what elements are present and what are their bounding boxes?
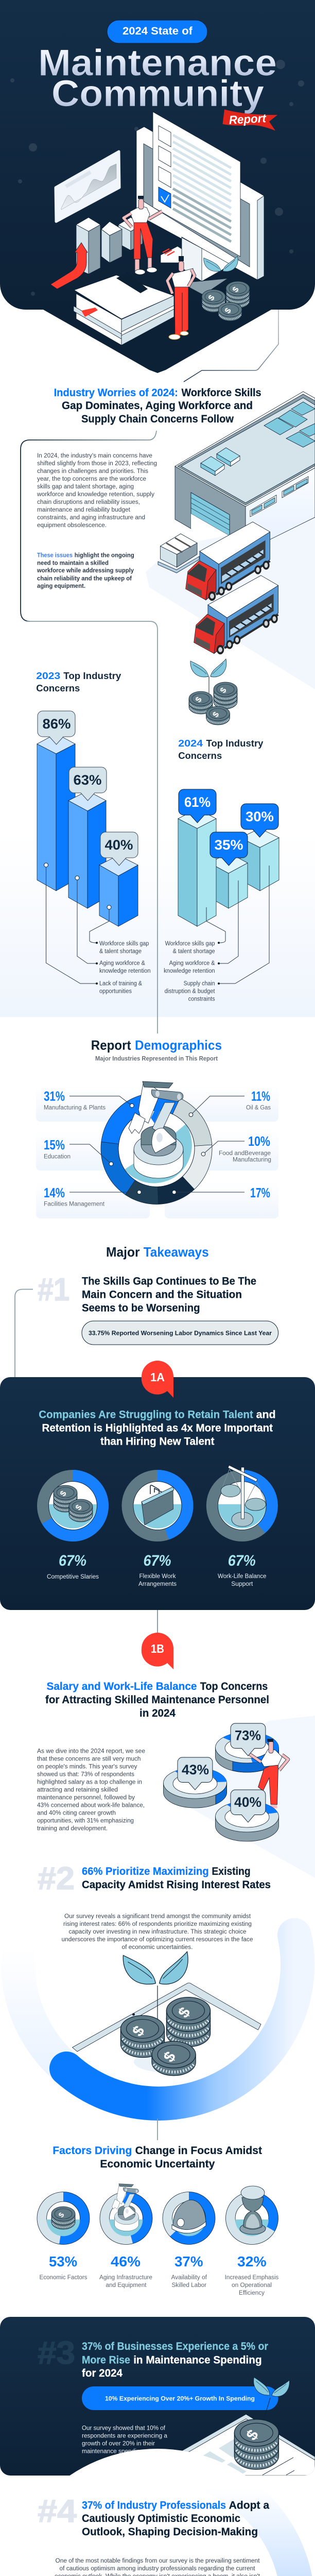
donut: skilled labor — [163, 2192, 215, 2289]
donut: flexible work: Flexible Work — [139, 1573, 176, 1580]
illustration: swoosh with laptop, plant and coins — [18, 1935, 297, 2104]
text block: takeaway 4: One of the most notable findings from our survey is the prevailing sentiment — [56, 2558, 260, 2564]
labels: Aging workforce & — [169, 960, 215, 967]
text block: 1B paragraph: training and development. — [37, 1826, 108, 1832]
text block: concerns intro: chain disruptions and reliability issues, — [37, 499, 140, 505]
stat: 14%: Facilities Management — [44, 1201, 105, 1208]
heading: takeaway 3: More Rise — [82, 2354, 130, 2366]
callout pill: 33.75% — [82, 1321, 278, 1345]
pie: 40%: 40% — [234, 1794, 261, 1810]
text block: 1B paragraph: on people's minds. This year's survey — [37, 1764, 137, 1770]
title: Maintenance — [38, 42, 277, 83]
heading: takeaway 1: Seems to be Worsening — [82, 1302, 200, 1314]
laptop with coins and plant — [182, 2377, 315, 2476]
callout pill: 33.75%: 33.75% Reported Worsening Labor Dynamics Since Last Year — [89, 1330, 272, 1336]
heading: Industry Worries: Workforce Skills — [181, 387, 261, 399]
stat panels — [36, 1086, 278, 1218]
stat: 11%: Oil & Gas — [246, 1105, 271, 1111]
text block: 1B paragraph: and 40% citing career growth — [37, 1810, 116, 1817]
text block: concerns intro: maintenance and reliability budget — [37, 507, 131, 513]
swoosh faint tail — [18, 1947, 66, 2069]
heading: 2024: 2024 — [178, 738, 203, 749]
text block: these issues: chain reliability and the upkeep of — [37, 575, 132, 582]
light background band — [0, 517, 315, 1017]
heading: 2024 — [178, 738, 264, 761]
labels: knowledge retention — [99, 968, 150, 974]
icon: coins — [202, 281, 250, 321]
icon: coins: $ — [223, 307, 233, 315]
chart: 2023 top industry concerns — [36, 670, 150, 994]
person — [249, 1739, 288, 1808]
donut: competitive salaries: Competitive Slaries — [47, 1574, 99, 1580]
heading: Report Demographics: Report — [91, 1038, 131, 1053]
heading: 1B — [45, 1681, 269, 1719]
heading: 1A: Companies Are Struggling to Retain Talent — [39, 1409, 253, 1421]
text block: these issues: need to maintain a skilled — [37, 560, 109, 566]
heading: factors driving: Change in Focus Amidst — [135, 2145, 262, 2157]
bubble: 73%: 73% — [235, 1728, 261, 1743]
donut: work-life balance — [212, 1465, 272, 1587]
truck rear — [186, 522, 270, 601]
text block: 1B paragraph: showed us that: 73% of respondents — [37, 1771, 134, 1777]
labels: Lack of training & — [99, 981, 142, 987]
leader lines — [44, 863, 111, 985]
donut: competitive salaries: $ — [74, 1503, 84, 1512]
text block: concerns intro: changes in challenges and priorities. This — [37, 468, 148, 474]
donut: economic factors: Economic Factors — [39, 2275, 87, 2281]
text block: takeaway 4 — [55, 2558, 260, 2576]
donut: flexible work — [128, 1476, 187, 1587]
bar: 86% — [37, 711, 75, 891]
connector line: hero to worries — [184, 310, 278, 382]
heading: Industry Worries — [54, 387, 261, 425]
stat: 11% — [246, 1088, 271, 1111]
panel: 1A retention — [0, 1361, 315, 1610]
bubble: 35%: 35% — [214, 837, 243, 853]
text block: 1B paragraph: that these concerns are still very much — [37, 1756, 141, 1762]
labels — [99, 941, 150, 994]
heading: Industry Worries: Supply Chain Concerns Follow — [81, 413, 234, 425]
heading: takeaway 2: 66% Prioritize Maximizing — [82, 1866, 209, 1877]
text block: 1B paragraph: 43% concerned about work-life balance, — [37, 1802, 145, 1808]
text block: concerns intro: skills gap and talent shortage, aging — [37, 484, 134, 490]
heading: factors driving: Factors Driving — [52, 2145, 132, 2157]
bar: 61% — [178, 789, 216, 926]
donut: competitive salaries — [43, 1476, 103, 1580]
donut: operational efficiency: on Operational — [232, 2282, 272, 2289]
badge: 1B — [142, 1633, 173, 1669]
bar columns — [76, 217, 143, 274]
text block: takeaway 2: Our survey reveals a significant trend amongst the community amidst — [64, 1913, 251, 1920]
text block: takeaway 3: maintenance spending — [82, 2448, 143, 2454]
heading: takeaway 3: 37% of Businesses Experience a 5% or — [82, 2341, 268, 2352]
donut: skilled labor: Availability of — [171, 2275, 207, 2281]
icon: plant and coins: $ — [194, 696, 204, 704]
labels: Aging workforce & — [99, 960, 145, 967]
heading: 2023: Concerns — [36, 683, 80, 693]
stat: 14% — [44, 1185, 105, 1208]
text block: takeaway 3: Our survey showed that 10% of — [82, 2425, 166, 2431]
text block: concerns intro: shifted slightly from those in 2023, reflecting — [37, 461, 157, 467]
bar: 63%: 63% — [73, 772, 102, 788]
chart: demographics donut — [36, 1081, 278, 1218]
heading: takeaway 1 — [82, 1276, 256, 1314]
stat: 15% — [44, 1137, 71, 1160]
text block: 1B paragraph: highlighted salary as a top challenge in — [37, 1780, 142, 1786]
heading: takeaway 1: The Skills Gap Continues to Be The — [82, 1276, 256, 1287]
donut: competitive salaries: 67% — [59, 1552, 86, 1569]
icon: coins: $ — [231, 285, 241, 294]
heading: takeaway 3 — [82, 2341, 268, 2379]
plant — [123, 1952, 188, 2022]
heading: takeaway 4 — [82, 2500, 269, 2538]
text block: these issues: highlight the ongoing — [75, 552, 134, 558]
donut: work-life balance: 67% — [228, 1552, 256, 1569]
donut: operational efficiency: 32% — [237, 2253, 267, 2269]
pill: 2024 State of: 2024 State of — [122, 25, 193, 37]
donut: skilled labor: 37% — [174, 2253, 203, 2269]
laptop outline — [72, 1983, 261, 2052]
ribbon: Report: Report — [229, 111, 267, 127]
text block: takeaway 4: of cautious optimism among industry professionals regarding the current — [60, 2566, 255, 2572]
heading: 2024: Top Industry — [206, 738, 264, 749]
labels: & talent shortage — [99, 948, 142, 955]
badge: 1B: 1B — [151, 1642, 164, 1655]
heading: 2023: Top Industry — [63, 670, 121, 681]
light diagonal background — [170, 1716, 315, 1878]
donut ring — [90, 1082, 223, 1215]
donut: aging infrastructure: and Equipment — [106, 2282, 147, 2289]
pill: 2024 State of — [107, 20, 207, 43]
heading: takeaway 1: Main Concern and the Situation — [82, 1289, 242, 1301]
bar: 63% — [68, 767, 107, 908]
donut: aging infrastructure — [99, 2184, 152, 2289]
heading: Major Takeaways: Major — [106, 1244, 140, 1260]
donut: operational efficiency — [225, 2186, 279, 2296]
pie: 43% — [157, 1757, 233, 1808]
labels: knowledge retention — [164, 968, 215, 974]
text block: 1B paragraph: attracting and retaining skilled — [37, 1787, 118, 1793]
bar: 30% — [240, 804, 279, 891]
callout pill: 10% — [82, 2386, 278, 2410]
panel: takeaway 3 — [0, 2317, 315, 2481]
stat: 10%: Manufacturing — [233, 1157, 271, 1163]
heading: takeaway 4: Adopt a — [229, 2500, 269, 2512]
title — [38, 42, 277, 114]
text block: takeaway 3 — [82, 2425, 168, 2454]
text block: these issues: workforce while addressing supply — [37, 568, 134, 574]
text block: takeaway 3: respondents are experiencing a — [82, 2433, 168, 2439]
ribbon: Report — [222, 109, 277, 131]
person standing — [124, 196, 162, 275]
coins: $ — [129, 2023, 148, 2040]
heading: Report Demographics — [91, 1038, 222, 1053]
icon: plant and coins: $ — [219, 686, 229, 695]
donut: skilled labor: Skilled Labor — [172, 2282, 206, 2289]
stat: 31% — [44, 1088, 106, 1111]
donut: operational efficiency: Increased Emphasis — [225, 2275, 279, 2281]
bar: 61%: 61% — [184, 794, 211, 810]
text block: concerns intro: In 2024, the industry's main concerns have — [37, 453, 152, 459]
stat: 10% — [219, 1133, 271, 1163]
donut: economic factors — [37, 2192, 90, 2281]
text block: 1B paragraph: As we dive into the 2024 report, we see — [37, 1749, 145, 1755]
monitor — [136, 127, 264, 280]
stat: 15%: 15% — [44, 1137, 65, 1153]
leader lines — [69, 1096, 244, 1194]
stat: 31%: Manufacturing & Plants — [44, 1105, 106, 1111]
boxes on pallet — [158, 534, 199, 573]
heading: 1B: Top Concerns — [200, 1681, 268, 1692]
icon: plant and coins — [189, 659, 237, 725]
connector: swoosh to factors — [157, 2119, 158, 2140]
illustration: warehouse and trucks — [158, 392, 315, 725]
takeaway number 1: #1 — [38, 1272, 69, 1308]
text block: concerns intro: equipment obsolescence. — [37, 522, 107, 529]
heading: factors driving — [52, 2145, 262, 2170]
heading: 1A: than Hiring New Talent — [100, 1436, 214, 1448]
labels: Workforce skills gap — [99, 941, 149, 947]
bar: 40% — [99, 832, 138, 926]
text block: 1B paragraph: opportunities, with 31% emphasizing — [37, 1818, 134, 1824]
stat: 15%: Education — [44, 1154, 71, 1160]
document checklist — [153, 112, 240, 257]
illustration: isometric pies and person — [157, 1723, 288, 1841]
donut: work-life balance: Support — [231, 1581, 253, 1587]
text block: 1B paragraph — [37, 1749, 145, 1832]
heading: 1A — [39, 1409, 276, 1448]
icon: plant and coins: $ — [211, 710, 221, 719]
heading: Industry Worries: Gap Dominates, Aging Workforce and — [62, 400, 253, 412]
text block: takeaway 2: rising interest rates: 66% of respondents prioritize maximizing existing — [63, 1921, 252, 1927]
bubble: 35% — [210, 832, 248, 866]
stat: 31%: 31% — [44, 1088, 65, 1104]
text block: these issues: These issues — [37, 552, 73, 558]
icon: robot arm — [129, 1081, 183, 1178]
heading: 2023 — [36, 670, 121, 693]
donut: operational efficiency: Efficiency — [239, 2290, 265, 2296]
bar: 86%: 86% — [42, 716, 71, 732]
heading: 1B: in 2024 — [139, 1707, 176, 1719]
text block: takeaway 2: capacity over investing in new infrastructure. This strategic choice — [69, 1929, 246, 1935]
bar: 40%: 40% — [105, 837, 133, 853]
text block: takeaway 3: growth of over 20% in their — [82, 2441, 155, 2447]
donut: aging infrastructure: 46% — [111, 2253, 141, 2269]
labels: opportunities — [99, 988, 132, 994]
heading: takeaway 2: Capacity Amidst Rising Interest Rates — [82, 1879, 271, 1891]
connector: takeaway 1 — [15, 1289, 33, 1377]
labels: Supply chain — [184, 981, 215, 987]
pie: 40% — [209, 1790, 285, 1841]
stat: 10%: Food andBeverage — [219, 1150, 271, 1157]
text block: concerns intro: constraints, and aging infrastructure and — [37, 515, 145, 521]
donut: economic factors: $ — [57, 2211, 66, 2219]
heading: 1A: Retention is Highlighted as 4x More Important — [42, 1422, 273, 1434]
heading: takeaway 2 — [82, 1866, 271, 1891]
laptop with coins and plant: $ — [243, 2427, 262, 2444]
title: Community — [51, 73, 264, 114]
donut: competitive salaries: $ — [59, 1489, 68, 1498]
text block: concerns intro: workforce and knowledge retention, supply — [37, 492, 154, 498]
arrow: growth — [50, 243, 87, 289]
donut: economic factors: 53% — [49, 2253, 77, 2269]
donut: aging infrastructure: Aging Infrastructure — [99, 2275, 152, 2281]
bubble: 73% — [231, 1723, 266, 1756]
connector: 1A to 1B — [157, 1610, 158, 1633]
badge: 1A — [142, 1361, 173, 1398]
heading: Major Takeaways: Takeaways — [144, 1244, 209, 1260]
text block: these issues — [37, 552, 134, 589]
hero panel — [0, 0, 315, 373]
icon: coins: $ — [207, 294, 217, 302]
connector: worries frame — [21, 431, 157, 1033]
truck front — [194, 575, 278, 654]
stat: 10%: 10% — [248, 1133, 270, 1149]
labels: & talent shortage — [173, 948, 215, 955]
heading: Major Takeaways — [106, 1244, 209, 1260]
chart card — [56, 151, 119, 222]
leader lines — [206, 866, 269, 985]
text block: concerns intro — [37, 453, 157, 529]
stat: 17%: 17% — [250, 1185, 270, 1200]
bar: 30%: 30% — [246, 809, 274, 824]
pie: 43%: 43% — [182, 1762, 209, 1777]
pie: 73% — [209, 1729, 285, 1772]
subheading: Major Industries Represented in This Report — [95, 1056, 218, 1062]
monitor stand — [161, 237, 231, 295]
labels: constraints — [188, 996, 215, 1003]
heading: Report Demographics: Demographics — [135, 1038, 222, 1053]
book stack — [74, 272, 174, 345]
takeaway number 2: #2 — [38, 1861, 75, 1896]
heading: factors driving: Economic Uncertainty — [100, 2158, 215, 2170]
heading: 1A: and — [256, 1409, 276, 1421]
heading: 2023: 2023 — [36, 670, 60, 681]
labels — [164, 941, 215, 1003]
heading: takeaway 4: Cautiously Optimistic Economic — [82, 2513, 240, 2524]
labels: Workforce skills gap — [165, 941, 215, 947]
heading: takeaway 4: 37% of Industry Professionals — [82, 2500, 226, 2512]
coins: $ — [175, 2004, 194, 2021]
callout pill: 10%: 10% Experiencing Over 20%+ Growth In Spending — [105, 2396, 255, 2402]
donut: work-life balance: Work-Life Balance — [218, 1573, 267, 1580]
takeaway number 4: #4 — [38, 2494, 77, 2529]
warehouse — [175, 392, 315, 539]
heading: 1B: Salary and Work-Life Balance — [46, 1681, 197, 1692]
chart: 2024 top industry concerns — [164, 738, 279, 1003]
text block: takeaway 2: of economic uncertainties. — [121, 1944, 192, 1951]
stat: 14%: 14% — [44, 1185, 65, 1200]
bar: 35% — [209, 853, 248, 908]
donut: flexible work: Arrangements — [138, 1581, 177, 1587]
stat: 11%: 11% — [251, 1088, 270, 1104]
large circle with swoosh — [0, 2449, 315, 2576]
coins: $ — [161, 2048, 179, 2065]
badge: 1A: 1A — [150, 1370, 165, 1384]
donut: flexible work: 67% — [143, 1552, 171, 1569]
text block: 1B paragraph: maintenance personnel, followed by — [37, 1795, 135, 1801]
labels: distruption & budget — [165, 988, 215, 994]
swoosh arc — [66, 1935, 297, 2104]
coins — [120, 1997, 211, 2076]
heading: 2024: Concerns — [178, 750, 222, 761]
illustration: isometric dashboard scene — [50, 112, 264, 345]
number 3: #3 — [38, 2335, 75, 2371]
heading: takeaway 3: in Maintenance Spending — [133, 2354, 262, 2366]
heading: takeaway 4: Outlook, Shaping Decision-Making — [82, 2526, 258, 2538]
text block: these issues: aging equipment. — [37, 583, 85, 589]
heading: Industry Worries: Industry Worries of 2024: — [54, 387, 178, 399]
heading: takeaway 3: for 2024 — [82, 2367, 122, 2379]
icon: leaves — [204, 256, 238, 272]
person seated — [167, 256, 195, 340]
heading: 1B: for Attracting Skilled Maintenance Personnel — [45, 1694, 269, 1706]
heading: takeaway 2: Existing — [212, 1866, 251, 1877]
text block: takeaway 2: underscores the importance of optimizing current resources in the face — [62, 1937, 253, 1943]
text block: concerns intro: year, the top concerns are the workforce — [37, 476, 146, 482]
text block: takeaway 2 — [62, 1913, 253, 1951]
